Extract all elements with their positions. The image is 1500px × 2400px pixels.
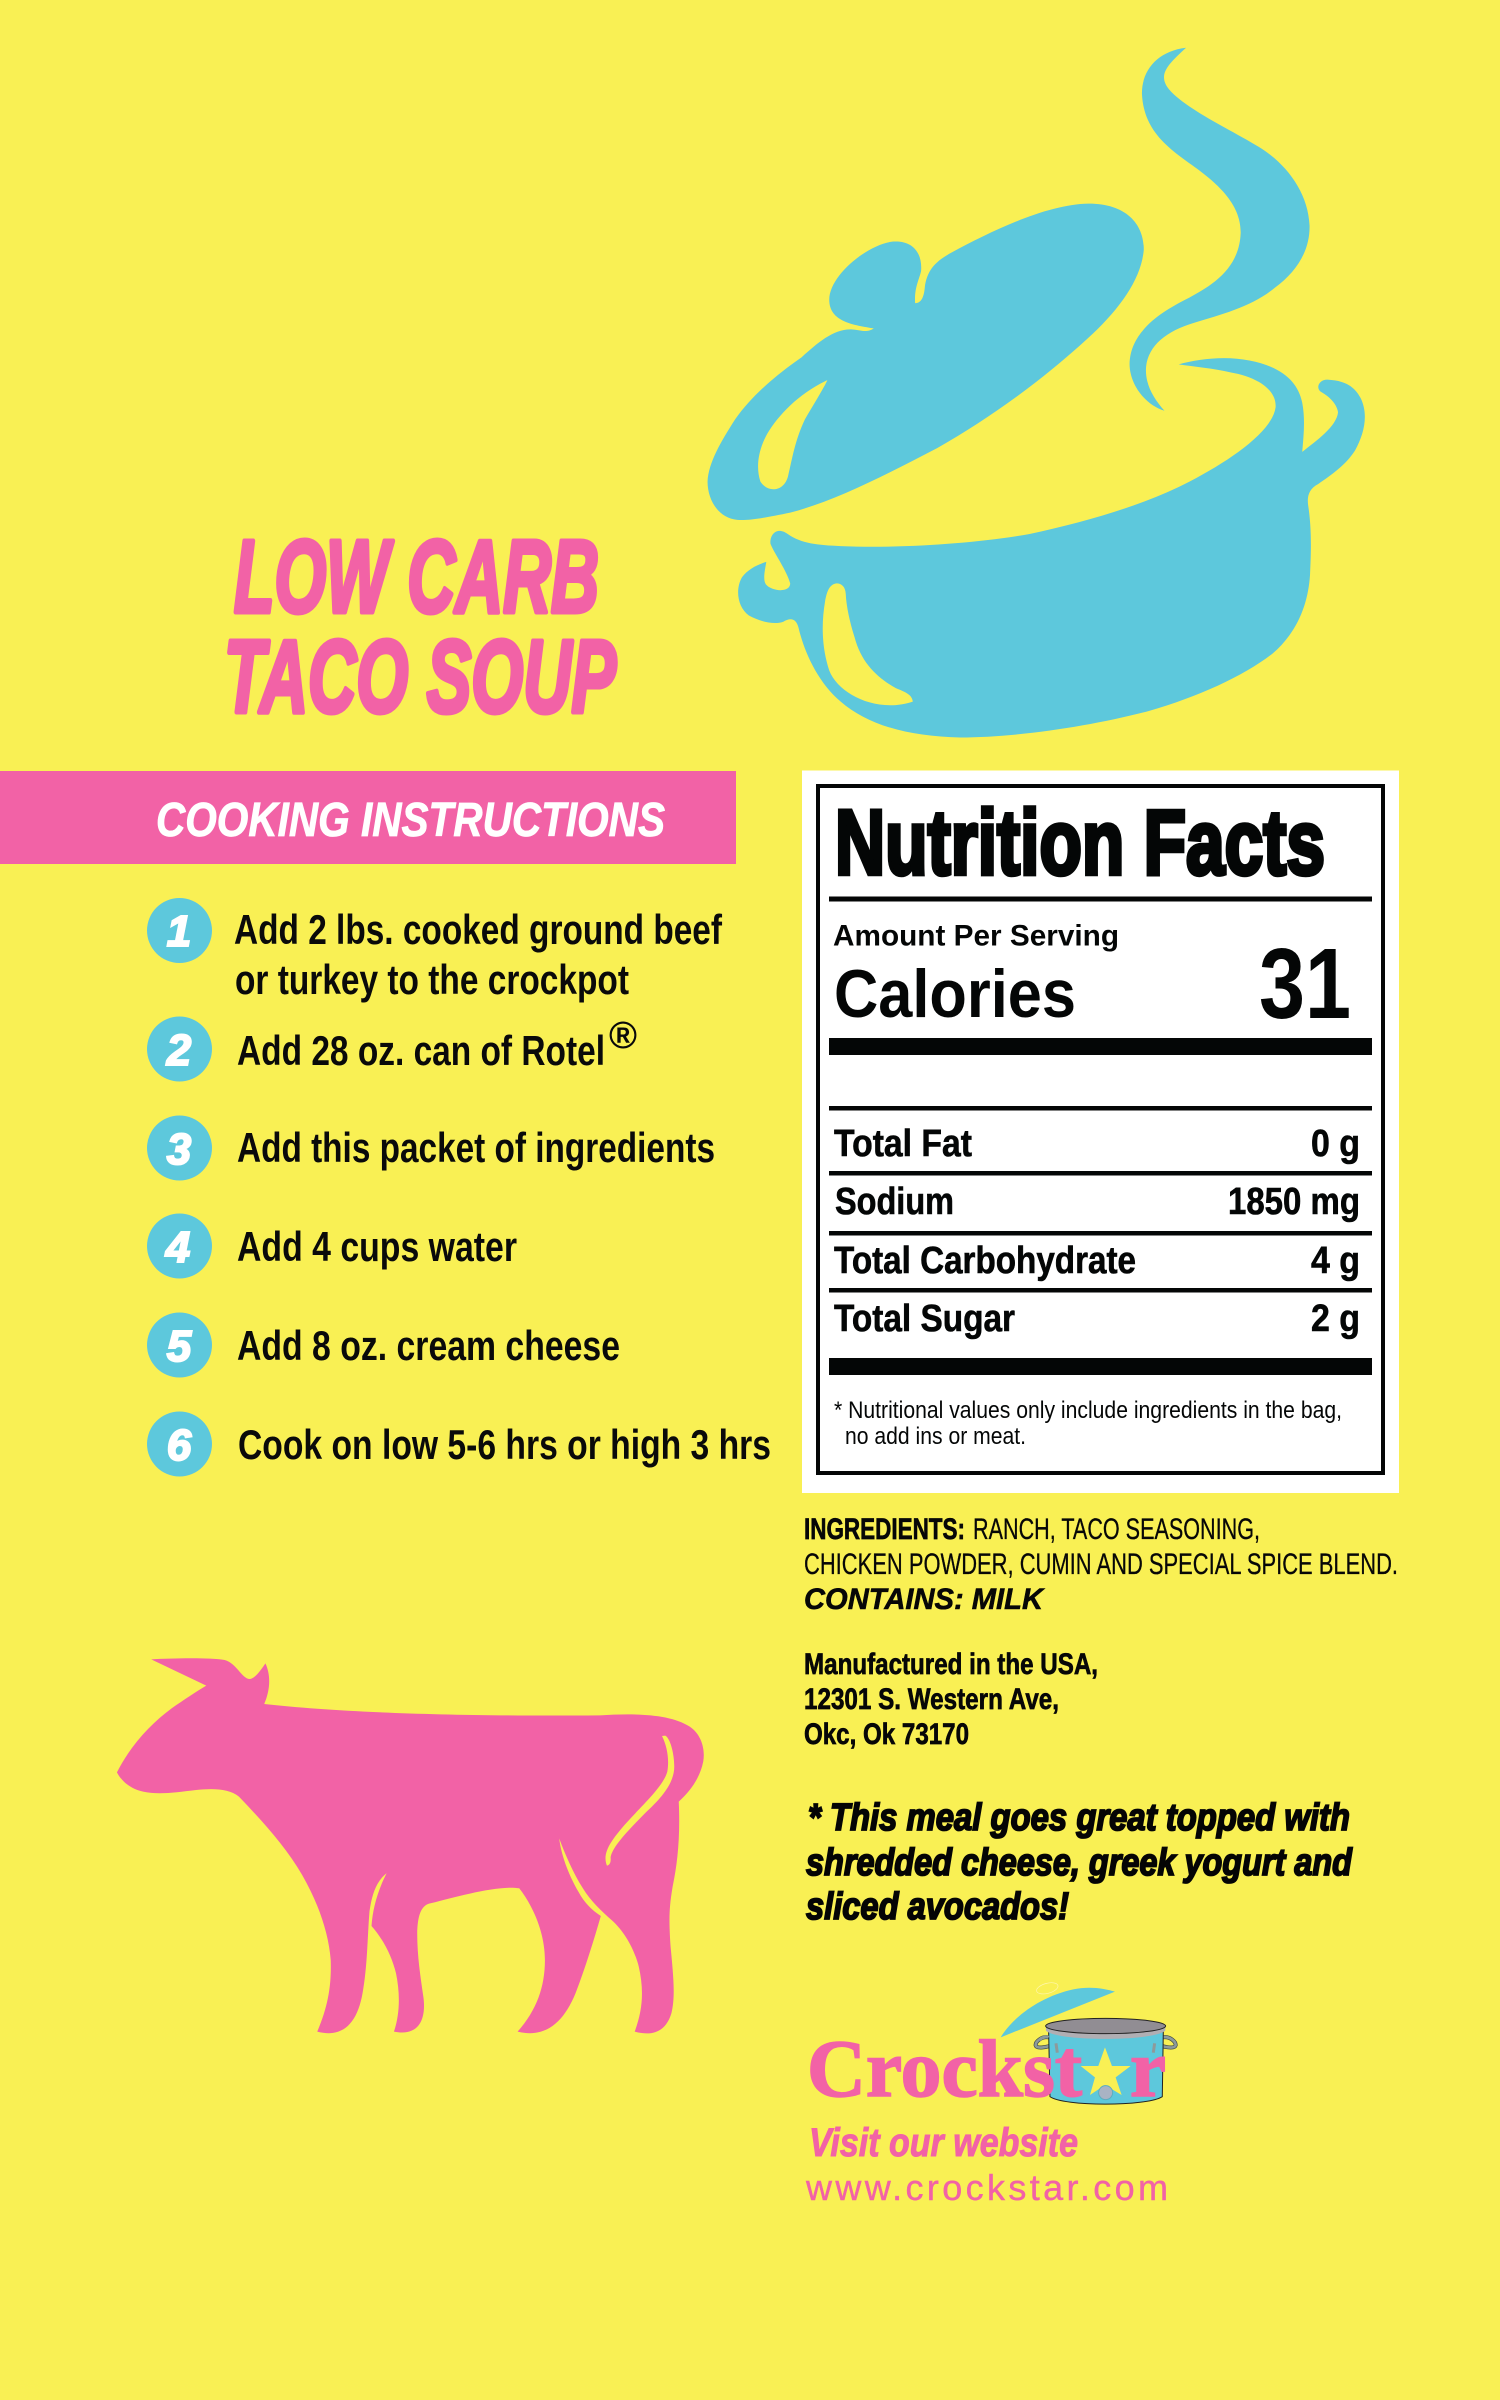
step 3: 3	[167, 1125, 191, 1174]
text block: serving tip: sliced avocados!	[806, 1886, 1069, 1928]
step 2: 2	[166, 1026, 192, 1075]
text block: ingredients: INGREDIENTS:	[804, 1513, 965, 1546]
text block: serving tip	[806, 1797, 1353, 1928]
step 6	[147, 1412, 771, 1476]
step 5: Add 8 oz. cream cheese	[237, 1322, 620, 1369]
title	[224, 519, 616, 734]
text: visit our website: Visit our website	[809, 2121, 1078, 2165]
panel: cooking instructions banner: COOKING INSTRUCTIONS	[156, 794, 665, 847]
row: sodium	[835, 1181, 1360, 1223]
panel: cooking instructions banner	[0, 771, 736, 864]
text: nutrition footnote	[834, 1397, 1342, 1450]
text block: manufacturer address: Manufactured in the USA,	[804, 1648, 1098, 1681]
step 3: Add this packet of ingredients	[237, 1124, 715, 1171]
step 1: or turkey to the crockpot	[235, 956, 629, 1003]
icon: steam	[1130, 48, 1310, 411]
panel: cooking steps	[147, 898, 771, 1476]
illustration: cow silhouette	[117, 1658, 704, 2033]
text: nutrition footnote: * Nutritional values only include ingredients in the bag,	[834, 1397, 1342, 1424]
text: calories: Calories	[834, 956, 1076, 1032]
logo: crockstar	[805, 1981, 1176, 2208]
icon: star	[1081, 2047, 1131, 2100]
row: total fat	[834, 1123, 1360, 1165]
step 2	[147, 1015, 637, 1082]
step 1: 1	[167, 907, 191, 956]
heading: nutrition facts: Nutrition Facts	[835, 792, 1325, 894]
row: total fat: 0 g	[1311, 1123, 1360, 1165]
step 4: Add 4 cups water	[237, 1223, 517, 1270]
text block: ingredients	[804, 1513, 1398, 1616]
row: sodium: Sodium	[835, 1181, 954, 1223]
step 4: 4	[165, 1223, 190, 1272]
text block: manufacturer address	[804, 1648, 1098, 1751]
illustration: steaming pot with lid	[708, 48, 1365, 737]
row: total carbohydrate: Total Carbohydrate	[834, 1240, 1136, 1282]
text: amount per serving: Amount Per Serving	[833, 920, 1119, 952]
step 2: Add 28 oz. can of Rotel	[237, 1027, 605, 1074]
row: total fat: Total Fat	[834, 1123, 972, 1165]
row: total sugar: Total Sugar	[834, 1298, 1015, 1340]
icon: pot lid	[708, 204, 1144, 520]
step 1	[147, 898, 723, 1003]
text block: manufacturer address: 12301 S. Western Ave,	[804, 1683, 1059, 1716]
text: crockstar wordmark: r	[1130, 2023, 1166, 2114]
step 1: Add 2 lbs. cooked ground beef	[234, 906, 723, 953]
step 4	[147, 1214, 517, 1278]
text block: manufacturer address: Okc, Ok 73170	[804, 1718, 969, 1751]
text block: serving tip: shredded cheese, greek yogurt and	[806, 1842, 1353, 1884]
row: sodium: 1850 mg	[1228, 1181, 1360, 1223]
step 5: 5	[167, 1322, 192, 1371]
step 3	[147, 1116, 715, 1180]
row: total sugar	[834, 1298, 1360, 1340]
text block: serving tip: * This meal goes great topped with	[808, 1797, 1350, 1839]
title: TACO SOUP	[224, 619, 616, 734]
step 6: 6	[167, 1421, 192, 1470]
row: total carbohydrate: 4 g	[1311, 1240, 1360, 1282]
row: total carbohydrate	[834, 1240, 1360, 1282]
step 5	[147, 1312, 620, 1378]
text: website url: www.crockstar.com	[805, 2167, 1168, 2208]
icon: logo pot	[1001, 1981, 1176, 2104]
step 6: Cook on low 5-6 hrs or high 3 hrs	[238, 1421, 771, 1468]
number: calories value: 31	[1259, 928, 1351, 1040]
title: LOW CARB	[234, 519, 599, 634]
row: total sugar: 2 g	[1311, 1298, 1360, 1340]
text: nutrition footnote: no add ins or meat.	[845, 1423, 1026, 1450]
text: crockstar wordmark: Crockst	[807, 2023, 1082, 2114]
panel: nutrition facts	[802, 770, 1399, 1493]
text block: ingredients: RANCH, TACO SEASONING,	[973, 1513, 1260, 1546]
step 2: ®	[609, 1015, 637, 1057]
text block: ingredients: CONTAINS: MILK	[804, 1583, 1045, 1616]
icon: pot body	[738, 358, 1365, 737]
